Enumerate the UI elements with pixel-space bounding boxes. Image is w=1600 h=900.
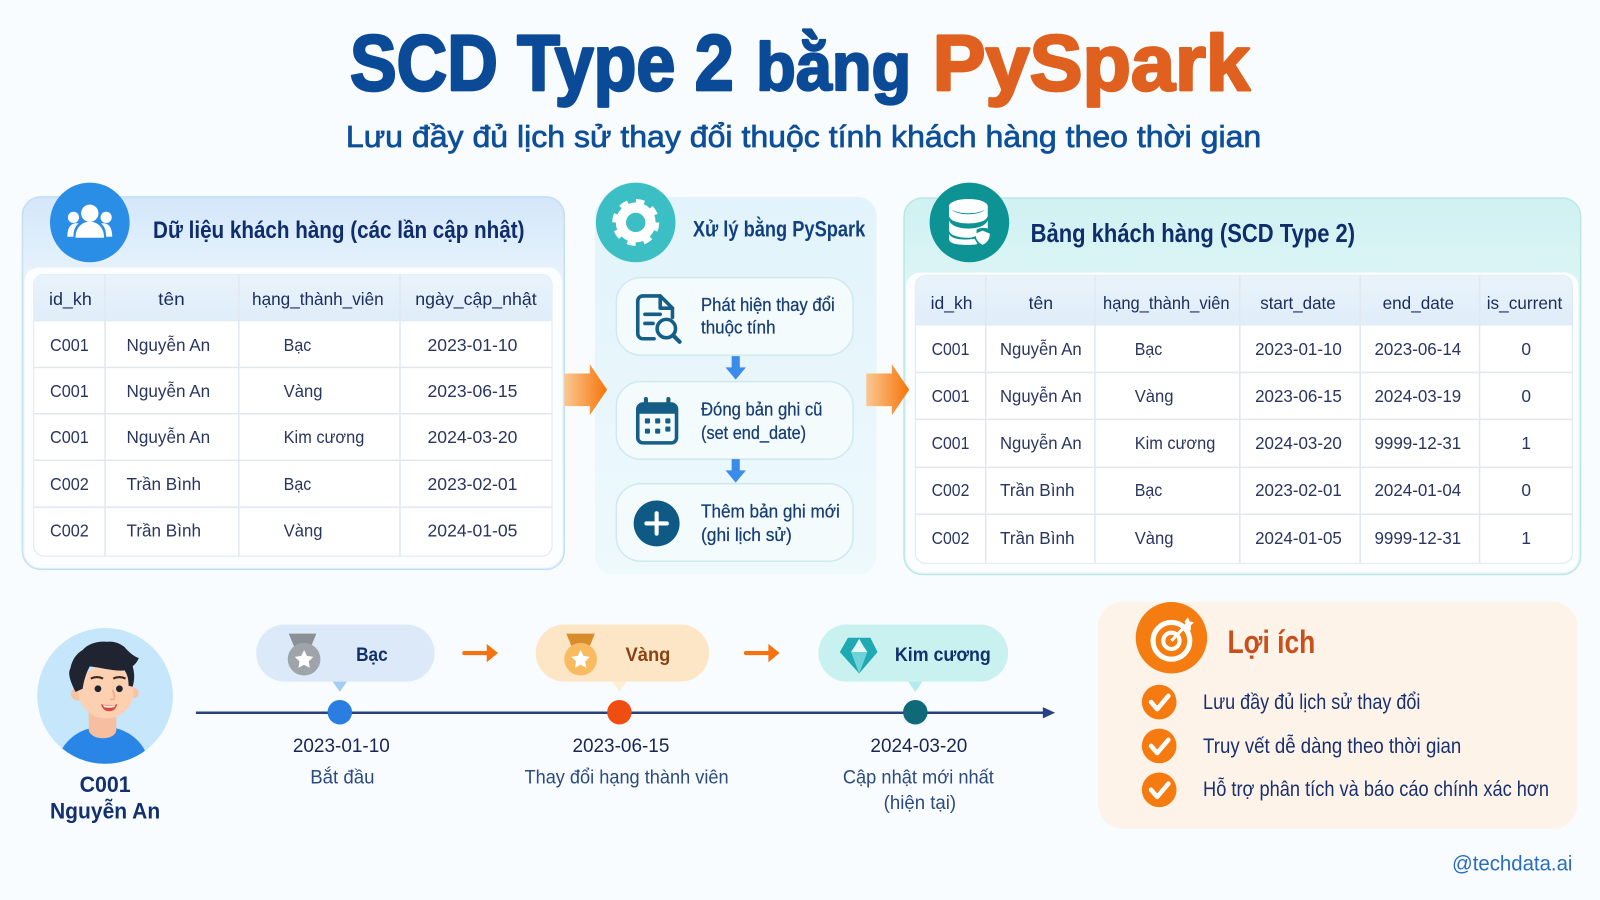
table body rows: Kim cương [284,427,364,447]
milestone: Kim cương: Cập nhật mới nhất [843,767,994,789]
table header row: id_kh [49,289,92,310]
table body rows: Trần Bình [1000,480,1074,500]
step: close old record: (set end_date) [701,422,806,444]
table body rows: Nguyễn An [127,427,210,447]
step: close old record: Đóng bản ghi cũ [701,398,822,419]
benefit item: Hỗ trợ phân tích và báo cáo chính xác hơn [1203,776,1549,801]
milestone: Vàng: 2023-06-15 [572,735,669,757]
table body rows: 2023-06-14 [1374,339,1462,359]
title: bằng [756,30,911,105]
panel: benefits [1098,602,1578,829]
table body rows: Bạc [284,335,312,355]
table body rows: 2023-01-10 [428,335,517,355]
arrow: step 2 to step 3 [726,459,746,483]
step: detect changes: thuộc tính [701,317,776,338]
panel heading: Lợi ích [1228,623,1315,660]
table body rows: Bạc [284,474,312,494]
step: detect changes [616,278,853,355]
table body rows: Vàng [284,521,322,541]
table body rows: C001 [932,433,969,453]
customer name: Nguyễn An [50,798,160,823]
step: close old record [616,382,853,459]
milestone: Vàng: Thay đổi hạng thành viên [524,767,729,789]
table body rows: C002 [932,528,969,548]
table body rows: C001 [932,386,969,406]
milestone: Bạc: Bạc [356,644,388,666]
icon: gold medal [564,634,597,676]
table body rows: C001 [50,335,89,355]
icon: target [1136,602,1207,673]
table body rows: Nguyễn An [1000,433,1082,453]
benefit item: Truy vết dễ dàng theo thời gian [1203,733,1461,758]
icon: database [930,183,1009,262]
table body rows: Kim cương [1135,433,1215,453]
arrow: processing to SCD table [866,364,909,415]
table body rows: Nguyễn An [127,335,210,355]
step: add new record: (ghi lịch sử) [701,524,792,545]
table body rows: 1 [1521,433,1531,453]
table body rows: 2024-01-05 [1255,528,1342,548]
table body rows: 2024-01-04 [1374,480,1462,500]
table body rows: Nguyễn An [127,381,210,401]
table body rows: 0 [1521,386,1531,406]
panel heading: Dữ liệu khách hàng (các lần cập nhật) [153,217,524,244]
table header row: tên [158,289,185,309]
panel: customer data [22,183,564,569]
table: customer updates [34,274,552,556]
panel: SCD Type 2 table [904,183,1581,574]
customer avatar [37,628,173,764]
table body rows: Vàng [1135,386,1173,406]
step: detect changes: Phát hiện thay đổi [701,294,835,315]
icon: plus [634,501,680,546]
table header row: tên [1029,293,1053,313]
title: PySpark [933,19,1250,107]
benefit item: Lưu đầy đủ lịch sử thay đổi [1203,690,1420,714]
table body rows: 2023-02-01 [1255,480,1342,500]
customer name: C001 [80,772,131,797]
table header row: is_current [1487,293,1562,314]
arrow: Bạc to Vàng [464,651,488,655]
table body rows: 9999-12-31 [1374,528,1461,548]
table header row [931,293,1562,314]
icon: gear [596,183,676,262]
table header row: hạng_thành_viên [252,289,384,310]
step: add new record [616,484,853,561]
icon: document search [638,296,680,342]
subtitle: Lưu đầy đủ lịch sử thay đổi thuộc tính khách hàng theo thời gian [346,120,1261,154]
table body rows: 2024-03-20 [428,427,517,447]
table body rows: 2024-03-19 [1374,386,1461,406]
table body rows: 1 [1521,528,1531,548]
table: SCD Type 2 records [915,276,1572,563]
milestone: Vàng: Vàng [626,644,670,666]
table body rows: Nguyễn An [1000,339,1082,359]
table body rows: Bạc [1135,480,1163,500]
table header row: ngày_cập_nhật [415,289,537,310]
icon: diamond [840,638,878,673]
table body rows: 2023-01-10 [1255,339,1342,359]
panel heading: Xử lý bằng PySpark [693,217,866,242]
table body rows: C001 [50,427,89,447]
arrow: Vàng to Kim cương [746,651,769,655]
table body rows: 0 [1521,480,1531,500]
step: add new record: Thêm bản ghi mới [701,500,840,521]
arrow: step 1 to step 2 [726,356,746,380]
table body rows: C001 [932,339,969,359]
table body rows: C002 [50,521,89,541]
milestone: Bạc: Bắt đầu [310,766,374,789]
milestone: Bạc: 2023-01-10 [293,735,390,757]
icon: calendar [638,399,677,443]
panel: PySpark processing [595,183,877,574]
table body rows: Bạc [1135,339,1163,359]
benefit item [1142,685,1420,719]
milestone: Kim cương: 2024-03-20 [870,735,968,757]
table header row: hạng_thành_viên [1103,293,1230,314]
milestone: Kim cương: Kim cương [895,644,991,666]
title [350,19,1250,107]
table body rows: C002 [50,474,89,494]
table body rows: Trần Bình [1000,528,1074,548]
timeline axis [196,707,1055,718]
milestone: Kim cương: (hiện tại) [884,792,956,814]
table header row: start_date [1260,293,1336,314]
table body rows: Vàng [1135,528,1173,548]
milestone: Kim cương [818,624,1008,814]
arrow: customer data to processing [564,364,607,415]
table body rows: Trần Bình [127,474,201,494]
table body rows: Trần Bình [127,521,201,541]
table body rows: 0 [1521,339,1531,359]
customer name [50,772,160,823]
table header row: end_date [1383,293,1454,314]
table body rows: 2023-06-15 [1255,386,1342,406]
table body rows: 2023-02-01 [428,474,517,494]
table body rows [50,335,517,541]
table header row [49,289,537,310]
table header row: id_kh [931,293,972,314]
benefit item [1142,772,1549,807]
benefit item [1142,729,1461,763]
table body rows [932,339,1531,548]
table body rows: Nguyễn An [1000,386,1082,406]
icon: silver medal [288,634,320,676]
table body rows: 2024-01-05 [428,521,517,541]
table body rows: C001 [50,381,89,401]
table body rows: 2024-03-20 [1255,433,1342,453]
table body rows: 2023-06-15 [428,381,517,401]
title: SCD Type 2 [350,19,734,107]
table body rows: C002 [932,480,969,500]
panel heading: Bảng khách hàng (SCD Type 2) [1031,220,1355,248]
icon: people [50,183,130,262]
milestone: Vàng [524,624,729,789]
table body rows: 9999-12-31 [1374,433,1461,453]
brand handle: @techdata.ai [1452,851,1572,875]
table body rows: Vàng [284,381,322,401]
milestone: Bạc [256,624,435,789]
